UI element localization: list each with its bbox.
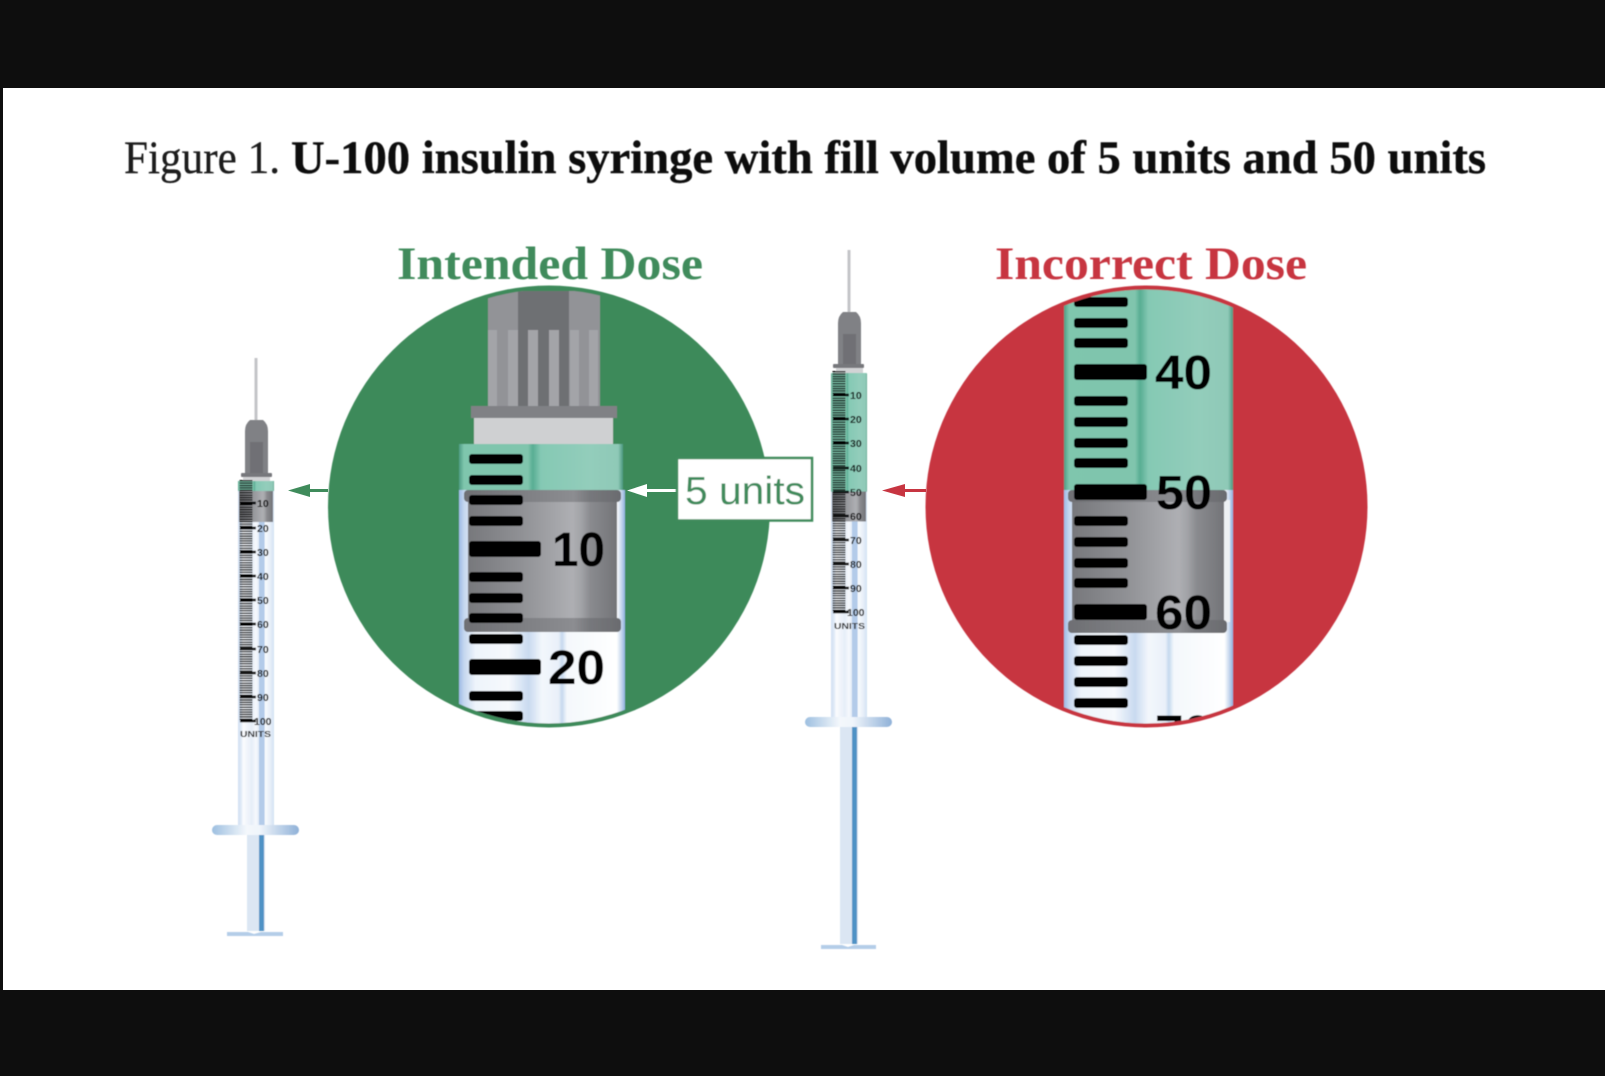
small syringe: 5 unit fill: 30 bbox=[257, 547, 269, 559]
small syringe: 50 unit fill: 40 bbox=[850, 463, 862, 475]
small syringe: 5 unit fill: 80 bbox=[257, 668, 269, 680]
arrow: white pointer to 5 unit mark bbox=[627, 484, 678, 497]
small syringe: 50 unit fill: 50 bbox=[850, 487, 862, 499]
enlarged syringe at 5 units: 20 bbox=[548, 642, 605, 695]
enlarged syringe at 50 units: 40 bbox=[1155, 347, 1212, 400]
small syringe: 5 unit fill: UNITS bbox=[240, 730, 272, 739]
small syringe: 5 unit fill bbox=[212, 358, 299, 936]
small syringe: 5 unit fill: 100 bbox=[254, 716, 272, 728]
small syringe: 50 unit fill bbox=[805, 250, 892, 949]
panel: intended dose magnifier bbox=[328, 286, 770, 730]
enlarged syringe at 50 units bbox=[1064, 285, 1233, 760]
enlarged syringe at 50 units: 50 bbox=[1156, 467, 1212, 520]
small syringe: 5 unit fill: 60 bbox=[257, 619, 269, 631]
arrow: green pointer to small syringe bbox=[288, 484, 328, 497]
red circle bbox=[926, 286, 1368, 728]
arrow: red pointer to small syringe bbox=[882, 484, 926, 497]
enlarged syringe at 50 units: 60 bbox=[1155, 587, 1212, 640]
small syringe: 50 unit fill: 20 bbox=[850, 414, 862, 426]
panel: incorrect dose magnifier bbox=[926, 285, 1368, 760]
small syringe: 5 unit fill: 90 bbox=[257, 692, 269, 704]
small syringe: 50 unit fill: UNITS bbox=[834, 622, 866, 631]
small syringe: 50 unit fill: 60 bbox=[850, 511, 862, 523]
small syringe: 50 unit fill: 10 bbox=[850, 390, 862, 402]
small syringe: 50 unit fill: 100 bbox=[847, 607, 865, 619]
small syringe: 5 unit fill: 20 bbox=[257, 523, 269, 535]
small syringe: 50 unit fill: 90 bbox=[850, 583, 862, 595]
heading: Incorrect Dose: Incorrect Dose bbox=[995, 238, 1307, 290]
small syringe: 5 unit fill: 70 bbox=[257, 644, 269, 656]
small syringe: 50 unit fill: 30 bbox=[850, 438, 862, 450]
heading: Intended Dose: Intended Dose bbox=[397, 238, 703, 290]
small syringe: 50 unit fill: 80 bbox=[850, 559, 862, 571]
callout: 5 units: 5 units bbox=[685, 470, 805, 513]
enlarged syringe at 50 units: 70 bbox=[1155, 707, 1212, 760]
title: Figure 1. bbox=[124, 132, 280, 184]
small syringe: 5 unit fill: 10 bbox=[257, 498, 269, 510]
title: U-100 insulin syringe with fill volume of 5 units and 50 units bbox=[291, 132, 1486, 184]
small syringe: 50 unit fill: 70 bbox=[850, 535, 862, 547]
enlarged syringe at 5 units: 10 bbox=[552, 524, 605, 577]
small syringe: 5 unit fill: 40 bbox=[257, 571, 269, 583]
small syringe: 5 unit fill: 50 bbox=[257, 595, 269, 607]
green circle bbox=[328, 286, 770, 728]
callout: 5 units bbox=[677, 458, 812, 520]
enlarged syringe at 5 units bbox=[459, 291, 625, 730]
